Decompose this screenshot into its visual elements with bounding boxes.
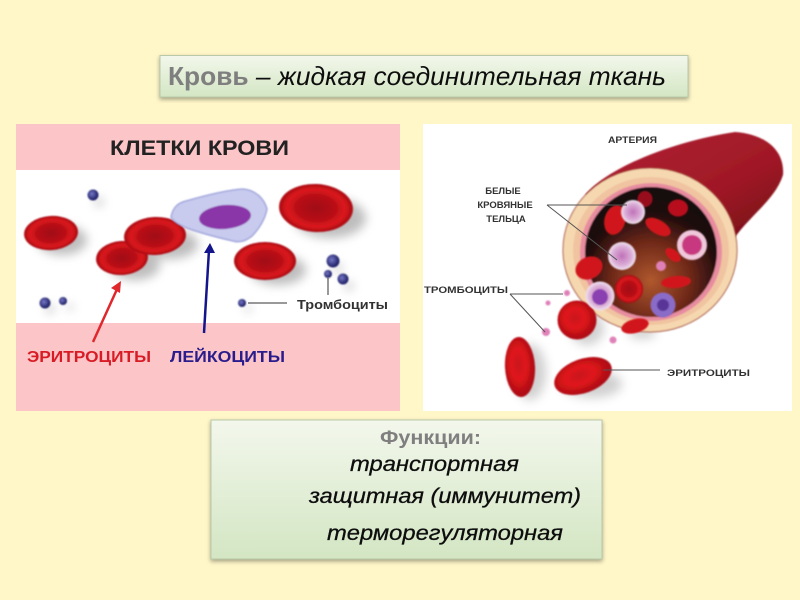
leader lines xyxy=(510,205,660,370)
functions heading: Функции: xyxy=(380,428,481,449)
artery wall xyxy=(563,168,737,332)
lumen xyxy=(585,187,717,317)
leukocytes label: ЛЕЙКОЦИТЫ xyxy=(170,347,285,366)
heading text: Кровь – жидкая соединительная ткань xyxy=(168,61,666,91)
panel: artery diagram xyxy=(423,124,792,411)
erythrocytes label: ЭРИТРОЦИТЫ xyxy=(27,349,151,366)
red arrow xyxy=(93,281,121,342)
erythrocytes label: ЭРИТРОЦИТЫ xyxy=(667,368,750,379)
platelet leader lines xyxy=(248,278,328,303)
platelets label: ТРОМБОЦИТЫ xyxy=(424,285,508,296)
outer cell shadows xyxy=(514,311,656,400)
heading box: blood definition xyxy=(160,56,688,97)
artery label: АРТЕРИЯ xyxy=(608,135,657,146)
red cells in lumen and outside xyxy=(503,191,691,402)
white band xyxy=(16,170,400,323)
function: thermoregulation: терморегуляторная xyxy=(327,522,563,545)
platelets xyxy=(40,190,348,308)
cell shadows xyxy=(37,198,366,313)
function: transport: транспортная xyxy=(350,453,519,476)
functions box xyxy=(211,420,602,559)
platelets in artery xyxy=(542,261,666,344)
white blood cells label: КРОВЯНЫЕ xyxy=(477,200,533,211)
white blood cells xyxy=(586,200,707,318)
panel: blood cells diagram xyxy=(16,124,400,411)
platelets label: Тромбоциты xyxy=(297,297,388,312)
artery tube xyxy=(585,132,783,240)
leukocyte xyxy=(171,189,267,242)
white blood cells label: ТЕЛЬЦА xyxy=(486,214,526,225)
function: protective: защитная (иммунитет) xyxy=(308,485,581,508)
white blood cells label: БЕЛЫЕ xyxy=(485,186,521,197)
blue arrow xyxy=(204,243,215,333)
erythrocytes xyxy=(23,182,354,280)
panel title: КЛЕТКИ КРОВИ xyxy=(110,136,289,160)
